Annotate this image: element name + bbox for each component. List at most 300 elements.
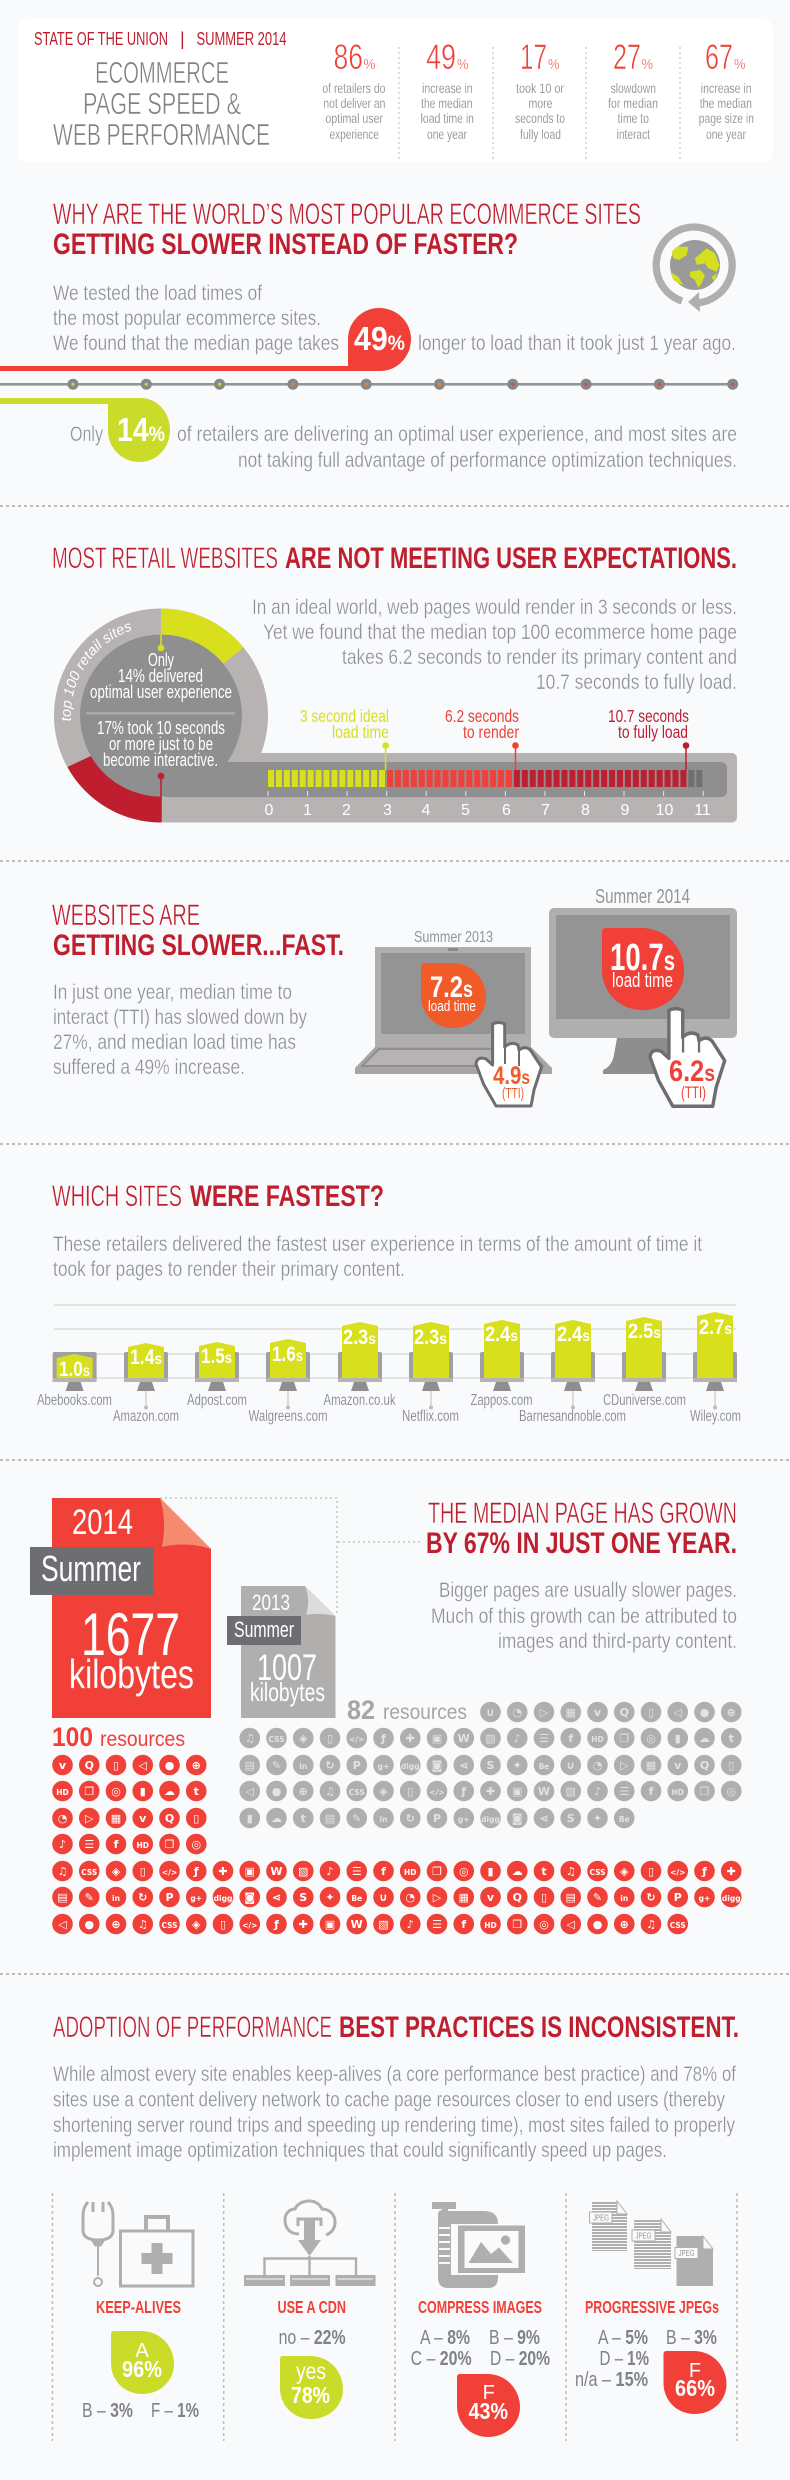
- load time blob: [602, 928, 684, 1010]
- icons: 82 gray resources: S: [567, 1812, 575, 1825]
- stat: 86%: experience: [330, 126, 379, 142]
- timeline: [0, 383, 734, 386]
- load time blob: [421, 963, 486, 1028]
- icons: 82 gray resources: ▦: [646, 1759, 656, 1772]
- panel: why sites are slower: [0, 198, 737, 472]
- stat: 86%: 86: [334, 38, 363, 77]
- icons: 82 gray resources: ▯: [648, 1706, 654, 1719]
- column: progressive JPEGs: PROGRESSIVE JPEGs: [585, 2297, 719, 2317]
- marker: 6.2 seconds: to render: [463, 722, 519, 742]
- icons: 82 gray resources: ◁: [674, 1706, 683, 1719]
- icons: 82 gray resources: Be: [539, 1762, 549, 1771]
- icons: 100 red resources: ✎: [85, 1891, 94, 1904]
- illustration: monitor summer 2014: [549, 886, 737, 1106]
- bar values: 2.5s: [628, 1320, 661, 1343]
- grades: [575, 2327, 717, 2391]
- heading: [426, 1497, 737, 1560]
- icons: 82 gray resources: ◈: [299, 1732, 308, 1745]
- callout: 49%: 49%: [354, 320, 405, 357]
- column: keep-alives: [82, 2202, 199, 2422]
- icons: 100 red resources: in: [620, 1894, 628, 1903]
- icons: 100 red resources: g+: [699, 1894, 710, 1903]
- stat: 86%: of retailers do: [322, 80, 386, 96]
- icons: 100 red resources: ▤: [566, 1891, 576, 1904]
- icons: 100 red resources: ◎: [111, 1785, 121, 1798]
- grade blob: F 66%: F: [689, 2360, 701, 2382]
- icons: 100 red resources: CSS: [670, 1921, 686, 1930]
- site names: Zappos.com: [470, 1392, 532, 1409]
- time axis: 4: [422, 802, 431, 819]
- grades: C – 20%: [411, 2348, 472, 2370]
- time axis: 2: [342, 802, 351, 819]
- icons: 82 gray resources: v: [674, 1759, 682, 1772]
- icons: 82 gray resources: ⋖: [539, 1812, 549, 1825]
- grade blob: A 96%: A: [135, 2340, 149, 2362]
- stat: 17%: more: [528, 95, 553, 111]
- icons: 82 gray resources: ∪: [566, 1759, 575, 1772]
- stat: 49%: 49: [426, 38, 456, 77]
- icons: 100 red resources: ♫: [646, 1918, 656, 1931]
- icon: globe with reload arrow: [656, 227, 732, 312]
- time axis: 5: [461, 802, 470, 819]
- icons: 100 red resources: ⊕: [620, 1918, 629, 1931]
- marker: 10.7 seconds: [608, 706, 689, 770]
- bar values: 1.0s: [59, 1358, 90, 1381]
- icons: 100 red resources: HD: [484, 1921, 497, 1930]
- icons: 100 red resources: ◙: [244, 1891, 255, 1904]
- icons: 100 red resources: v: [59, 1759, 67, 1772]
- icons: 82 gray resources: ◙: [512, 1812, 523, 1825]
- bar values: 2.3s: [343, 1326, 376, 1349]
- heading: WHICH SITES: [52, 1180, 182, 1213]
- icons: 100 red resources: ☁: [164, 1785, 175, 1798]
- icons: 100 red resources: ♫: [58, 1865, 67, 1878]
- icons: 100 red resources: ƒ: [193, 1865, 199, 1878]
- marker: 10.7 seconds: to fully load: [618, 722, 688, 742]
- icons: 82 gray resources: ◎: [646, 1732, 656, 1745]
- icons: 100 red resources: ⋖: [272, 1891, 281, 1904]
- bar values: 2.4s: [557, 1323, 590, 1346]
- stat: 67%: [699, 38, 754, 142]
- grade blob: A 96%: 96%: [122, 2356, 162, 2382]
- icons: 82 gray resources: g+: [378, 1762, 389, 1771]
- column: compress images: [411, 2202, 550, 2437]
- grade blob: yes 78%: [280, 2356, 343, 2419]
- stat: 67%: one year: [706, 126, 746, 142]
- icons: 82 gray resources: ▷: [620, 1759, 629, 1772]
- icons: 82 gray resources: g+: [458, 1815, 470, 1824]
- time axis: 6: [502, 802, 511, 819]
- heading: GETTING SLOWER INSTEAD OF FASTER?: [53, 228, 518, 261]
- heading: [53, 2011, 739, 2044]
- heading: [52, 899, 344, 962]
- icons: 82 gray resources: S: [487, 1759, 495, 1772]
- icons: 100 red resources: g+: [190, 1894, 202, 1903]
- icons: 82 gray resources: ƒ: [380, 1732, 386, 1745]
- icon: clamp squeezing image: [432, 2202, 525, 2288]
- icons: 82 gray resources: ▯: [327, 1732, 333, 1745]
- stat: 27%: time to: [618, 110, 649, 126]
- heading: [52, 542, 737, 575]
- text: TTI paragraph: interact (TTI) has slowed down by: [53, 1005, 307, 1029]
- icons: 100 red resources: ✚: [727, 1865, 736, 1878]
- panel: page growth: [30, 1497, 741, 1931]
- icons: 82 gray resources: ✎: [272, 1759, 281, 1772]
- callout: 14%: 14%: [117, 411, 165, 448]
- grades: A – 8%: [420, 2327, 470, 2349]
- icon: cloud with CDN servers: [244, 2201, 376, 2286]
- site names: Amazon.co.uk: [324, 1392, 396, 1409]
- stat: 17%: fully load: [520, 126, 561, 142]
- load time blob: 7.2s: [430, 971, 473, 1004]
- time axis: 1: [303, 802, 312, 819]
- icon: JPEG documents: JPEG: [593, 2214, 609, 2222]
- marker: 3 second ideal: 3 second ideal: [300, 706, 389, 726]
- document: 2013: kilobytes: [250, 1677, 325, 1707]
- stat: 17%: 17: [520, 38, 547, 77]
- icons: 82 gray resources: ▮: [247, 1812, 253, 1825]
- grade blob: F 43%: F: [483, 2382, 495, 2404]
- other grades: [82, 2400, 199, 2422]
- column: compress images: COMPRESS IMAGES: [418, 2297, 542, 2317]
- icons: 82 gray resources: ☁: [271, 1812, 282, 1825]
- icons: 100 red resources: digg: [722, 1894, 741, 1903]
- icons: 82 gray resources: ▮: [675, 1732, 681, 1745]
- site names: [37, 1392, 741, 1425]
- icons: 82 gray resources: ▷: [540, 1706, 549, 1719]
- icons: 100 red resources: ƒ: [701, 1865, 707, 1878]
- icons: 100 red resources: in: [112, 1894, 120, 1903]
- icons: 100 red resources: P: [674, 1891, 682, 1904]
- icons: 82 gray resources: CSS: [268, 1735, 285, 1744]
- icons: 100 red resources: CSS: [589, 1868, 606, 1877]
- icons: 100 red resources: ▦: [459, 1891, 469, 1904]
- icons: 100 red resources: ◔: [58, 1812, 67, 1825]
- site names: CDuniverse.com: [603, 1392, 686, 1409]
- grade blob: F 66%: 66%: [675, 2375, 715, 2401]
- icons: 100 red resources: ▧: [378, 1918, 389, 1931]
- icons: 82 gray resources: W: [538, 1785, 550, 1798]
- icons: 100 red resources: ✎: [593, 1891, 602, 1904]
- callout: 49%: [0, 308, 411, 371]
- text: load time intro: We found that the median page takes: [53, 331, 339, 355]
- icons: 82 gray resources: ▧: [485, 1732, 496, 1745]
- stat: 17%: took 10 or: [516, 80, 564, 96]
- icon: JPEG documents: [590, 2201, 713, 2286]
- stat: 17%: seconds to: [515, 110, 565, 126]
- column: use a CDN: no – 22%: [279, 2327, 346, 2349]
- main title: PAGE SPEED &: [83, 86, 241, 121]
- icons: 82 gray resources: f: [568, 1732, 573, 1745]
- stat: 67%: the median: [700, 95, 752, 111]
- icons: 82 gray resources: ✚: [406, 1732, 415, 1745]
- marker: 6.2 seconds: 6.2 seconds: [445, 706, 519, 726]
- icons: 100 red resources: ▷: [85, 1812, 94, 1825]
- chart: top 100 donut with load time bar: [54, 608, 737, 822]
- icons: 100 red resources: Q: [165, 1812, 174, 1825]
- tag: Summer: Summer: [234, 1617, 294, 1642]
- document: 2014: kilobytes: [69, 1651, 194, 1697]
- site names: Abebooks.com: [37, 1392, 112, 1409]
- text: TTI paragraph: [53, 980, 307, 1079]
- icons: 82 gray resources: Be: [619, 1815, 630, 1824]
- icons: 100 red resources: v: [487, 1891, 495, 1904]
- text: load time intro: the most popular ecommerce sites.: [53, 306, 321, 330]
- marker: 6.2 seconds: [445, 706, 519, 770]
- icons: 100 red resources: ◈: [112, 1865, 121, 1878]
- main title: [53, 55, 270, 152]
- label: 82 resources: 82: [347, 1695, 375, 1725]
- bar values: 1.6s: [272, 1343, 303, 1366]
- icons: 100 red resources: ↻: [646, 1891, 656, 1904]
- icons: 100 red resources: CSS: [161, 1921, 178, 1930]
- icons: 82 gray resources: </>: [429, 1788, 445, 1797]
- icons: 100 red resources: </>: [242, 1921, 257, 1930]
- icons: 100 red resources: ❐: [165, 1838, 175, 1851]
- site names: Netflix.com: [402, 1408, 459, 1425]
- icons: 100 red resources: ▯: [140, 1865, 146, 1878]
- icons: 82 gray resources: W: [458, 1732, 470, 1745]
- text: TTI paragraph: In just one year, median time to: [53, 980, 292, 1004]
- icons: 100 red resources: HD: [56, 1788, 69, 1797]
- icons: 82 gray resources: Q: [700, 1759, 709, 1772]
- illustration: laptop summer 2013: [355, 929, 552, 1106]
- bar values: 2.4s: [485, 1323, 518, 1346]
- icons: 100 red resources: ▮: [140, 1785, 146, 1798]
- heading: ADOPTION OF PERFORMANCE: [53, 2011, 332, 2044]
- time axis: 3: [383, 802, 392, 819]
- icons: 82 gray resources: ♪: [514, 1732, 521, 1745]
- icons: 100 red resources: t: [541, 1865, 547, 1878]
- icons: 82 gray resources: ☁: [699, 1732, 710, 1745]
- time axis: 7: [541, 802, 550, 819]
- stat: 49%: the median: [421, 95, 472, 111]
- stat: 67%: 67: [705, 38, 733, 77]
- icons: 100 red resources: t: [194, 1785, 199, 1798]
- grades: B – 9%: [489, 2327, 540, 2349]
- icons: 100 red resources: [56, 1759, 741, 1931]
- stat: 67%: %: [734, 56, 746, 73]
- bar values: [59, 1316, 732, 1381]
- cursor: 6.2s TTI: 6.2s: [669, 1055, 715, 1088]
- text: bigger pages: images and third-party content.: [498, 1629, 737, 1653]
- cursor: 6.2s TTI: (TTI): [681, 1083, 706, 1102]
- icons: 82 gray resources: ∪: [486, 1706, 495, 1719]
- bar values: 2.7s: [699, 1316, 732, 1339]
- donut pins: [158, 634, 164, 822]
- icons: 82 gray resources: in: [299, 1762, 307, 1771]
- heading: GETTING SLOWER...FAST.: [53, 929, 344, 962]
- icons: 82 gray resources: f: [649, 1785, 654, 1798]
- icons: 82 gray resources: ☰: [619, 1785, 629, 1798]
- grades: D – 20%: [490, 2348, 550, 2370]
- icons: 82 gray resources: CSS: [349, 1788, 365, 1797]
- column: use a CDN: USE A CDN: [278, 2297, 346, 2317]
- grade blob: yes 78%: yes: [296, 2358, 326, 2384]
- icons: 82 gray resources: v: [594, 1706, 602, 1719]
- marker: 3 second ideal: [300, 706, 389, 770]
- icons: 82 gray resources: ⊕: [299, 1785, 308, 1798]
- label: 82 resources: resources: [383, 1701, 467, 1724]
- icons: 100 red resources: ◈: [620, 1865, 629, 1878]
- icons: 100 red resources: CSS: [81, 1868, 97, 1877]
- donut text: [86, 650, 235, 770]
- icons: 100 red resources: P: [165, 1891, 174, 1904]
- callout: 14%: [0, 398, 170, 462]
- icons: 100 red resources: ♪: [326, 1865, 334, 1878]
- grade blob: yes 78%: 78%: [291, 2382, 330, 2408]
- icon: JPEG documents: JPEG: [636, 2232, 652, 2240]
- grades: B – 3%: [666, 2327, 717, 2349]
- stat: 49%: [421, 38, 474, 142]
- icons: 100 red resources: ❐: [512, 1918, 522, 1931]
- stat: 86%: [322, 38, 386, 142]
- icons: 100 red resources: ❐: [84, 1785, 94, 1798]
- icons: 82 gray resources: ❐: [700, 1785, 710, 1798]
- heading: WEBSITES ARE: [52, 899, 200, 932]
- time axis: 11: [694, 802, 711, 819]
- header kicker: STATE OF THE UNION: [34, 29, 168, 49]
- cursor: 4.9s TTI: (TTI): [502, 1085, 524, 1102]
- icons: 100 red resources: ●: [593, 1918, 602, 1931]
- label: 100 resources: resources: [100, 1728, 185, 1751]
- icons: 82 gray resources: t: [301, 1812, 306, 1825]
- donut text: or more just to be: [109, 734, 213, 754]
- icons: 100 red resources: ◁: [139, 1759, 148, 1772]
- donut text: become interactive.: [103, 750, 218, 770]
- icons: 100 red resources: ☰: [432, 1918, 442, 1931]
- heading: [53, 198, 641, 261]
- icons: 100 red resources: ▧: [298, 1865, 308, 1878]
- label: 82 resources: [347, 1695, 467, 1725]
- bars: [57, 1312, 733, 1378]
- icons: 100 red resources: ▯: [193, 1812, 199, 1825]
- icons: 82 gray resources: ✎: [352, 1812, 361, 1825]
- text: keep-alives paragraph: [53, 2062, 736, 2162]
- icons: 82 gray resources: in: [380, 1815, 387, 1824]
- curved label: top 100 retail sites: [62, 624, 132, 721]
- icons: 82 gray resources: ▦: [566, 1706, 576, 1719]
- panel: getting slower fast: [52, 886, 737, 1106]
- site names: Barnesandnoble.com: [519, 1408, 626, 1425]
- stat: 27%: [608, 38, 658, 142]
- document: 2014: 2014: [72, 1503, 133, 1542]
- text: TTI paragraph: suffered a 49% increase.: [53, 1055, 245, 1079]
- bar values: 1.5s: [201, 1345, 232, 1368]
- icons: 82 gray resources: ◔: [593, 1759, 602, 1772]
- cursor: 4.9s TTI: 4.9s: [493, 1062, 530, 1090]
- icons: 82 gray resources: Q: [620, 1706, 629, 1719]
- icons: 100 red resources: ◎: [539, 1918, 549, 1931]
- document: 2014: [30, 1498, 211, 1718]
- cursor: 6.2s TTI: [650, 1009, 725, 1106]
- label: 100 resources: 100: [52, 1722, 93, 1752]
- icons: 100 red resources: Q: [85, 1759, 94, 1772]
- icons: 82 gray resources: ✚: [486, 1785, 495, 1798]
- dotted connector: [160, 1498, 422, 1616]
- icons: 82 gray resources: ▤: [325, 1812, 335, 1825]
- panel: best practices: [52, 2011, 739, 2441]
- icon: JPEG documents: JPEG: [678, 2249, 694, 2258]
- marker: 3 second ideal: load time: [332, 722, 389, 742]
- icons: 82 gray resources: P: [353, 1759, 361, 1772]
- icons: 82 gray resources: ⊕: [727, 1706, 736, 1719]
- monitors: [53, 1352, 737, 1410]
- document: 2013: 2013: [252, 1590, 290, 1615]
- icons: 100 red resources: ◁: [58, 1918, 67, 1931]
- icons: 100 red resources: ◎: [459, 1865, 469, 1878]
- icons: 82 gray resources: ▯: [728, 1759, 734, 1772]
- cursor: 4.9s TTI: [476, 1022, 542, 1106]
- icons: 100 red resources: W: [270, 1865, 283, 1878]
- stat: 27%: interact: [617, 126, 650, 142]
- stat: 67%: page size in: [699, 110, 754, 126]
- donut text: 14% delivered: [118, 666, 203, 686]
- icons: 100 red resources: ♪: [407, 1918, 414, 1931]
- icons: 82 gray resources: ◎: [726, 1785, 736, 1798]
- stat: 86%: %: [364, 56, 376, 73]
- icons: 100 red resources: ▷: [433, 1891, 442, 1904]
- icons: 100 red resources: HD: [404, 1868, 417, 1877]
- site names: Wiley.com: [690, 1408, 741, 1425]
- main title: ECOMMERCE: [95, 55, 229, 90]
- grade blob: F 66%: [664, 2351, 726, 2414]
- column: keep-alives: KEEP-ALIVES: [96, 2297, 181, 2317]
- time axis: [265, 791, 711, 819]
- grade blob: F 43%: 43%: [468, 2398, 508, 2424]
- panel: user expectations: [52, 542, 737, 822]
- icons: 82 gray resources: digg: [481, 1815, 500, 1824]
- icons: 100 red resources: ∪: [379, 1891, 388, 1904]
- icons: 82 gray resources: ◈: [379, 1785, 388, 1798]
- stat: 27%: for median: [608, 95, 658, 111]
- grade blob: A 96%: [111, 2331, 174, 2394]
- icons: 82 gray resources: ↻: [406, 1812, 415, 1825]
- icons: 100 red resources: f: [461, 1918, 466, 1931]
- donut text: optimal user experience: [90, 682, 232, 702]
- icons: 100 red resources: S: [299, 1891, 307, 1904]
- icons: 82 gray resources: ♫: [325, 1785, 335, 1798]
- icons: 82 gray resources: ▣: [512, 1785, 522, 1798]
- icons: 82 gray resources: ❐: [619, 1732, 629, 1745]
- icons: 100 red resources: ▯: [220, 1918, 226, 1931]
- stat: 86%: optimal user: [325, 110, 383, 126]
- icons: 100 red resources: ☰: [352, 1865, 362, 1878]
- document: 2013: [227, 1586, 336, 1718]
- header card: [18, 19, 773, 163]
- stat: 67%: increase in: [701, 80, 752, 96]
- label: 100 resources: [52, 1722, 185, 1752]
- icons: 100 red resources: </>: [162, 1868, 177, 1877]
- icons: 100 red resources: ▮: [487, 1865, 494, 1878]
- icons: 100 red resources: ▣: [245, 1865, 255, 1878]
- stat: 27%: 27: [613, 38, 641, 77]
- grades: [411, 2327, 550, 2370]
- icons: 82 gray resources: ▧: [566, 1785, 576, 1798]
- icons: 100 red resources: ▤: [57, 1891, 68, 1904]
- panel: fastest sites: [37, 1180, 741, 1425]
- bar values: 2.3s: [414, 1326, 447, 1349]
- icons: 100 red resources: v: [139, 1812, 147, 1825]
- document: 2014: 1677: [81, 1601, 180, 1668]
- icons: 100 red resources: </>: [670, 1868, 685, 1877]
- icons: 100 red resources: ◈: [192, 1918, 201, 1931]
- illustration: laptop summer 2013: Summer 2013: [414, 929, 493, 946]
- icons: 100 red resources: ƒ: [273, 1918, 279, 1931]
- icons: 100 red resources: ●: [165, 1759, 174, 1772]
- column: progressive JPEGs: [575, 2201, 726, 2414]
- icons: 100 red resources: f: [381, 1865, 386, 1878]
